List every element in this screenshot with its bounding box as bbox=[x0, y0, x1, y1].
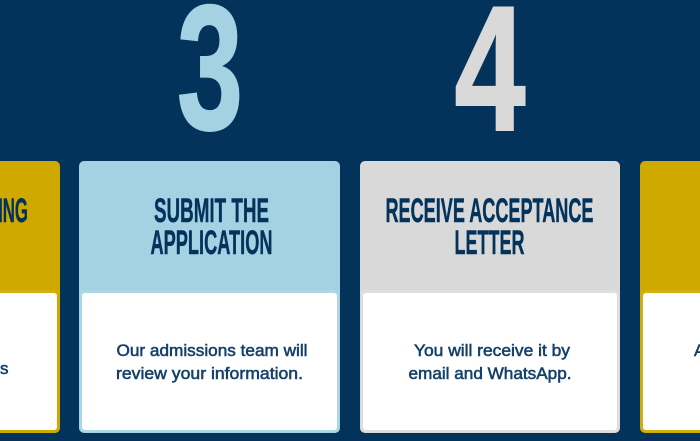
card 2 body fragment: s bbox=[0, 359, 8, 378]
card 3: submit the application: review your information. bbox=[116, 364, 303, 383]
card 3: submit the application bbox=[79, 161, 340, 433]
card 4 body: You will receive it by bbox=[414, 341, 571, 360]
card 4: receive acceptance letter: LETTER bbox=[454, 224, 524, 262]
card 4: receive acceptance letter bbox=[360, 161, 620, 433]
card 3 heading: SUBMIT THE bbox=[154, 192, 269, 230]
card 2: partially visible gold step bbox=[0, 161, 60, 433]
card 5: partially visible gold step bbox=[640, 161, 700, 433]
card 4: receive acceptance letter: email and WhatsApp. bbox=[408, 364, 572, 383]
card 3: submit the application: APPLICATION bbox=[150, 224, 272, 262]
card 3 body: Our admissions team will bbox=[116, 341, 308, 360]
